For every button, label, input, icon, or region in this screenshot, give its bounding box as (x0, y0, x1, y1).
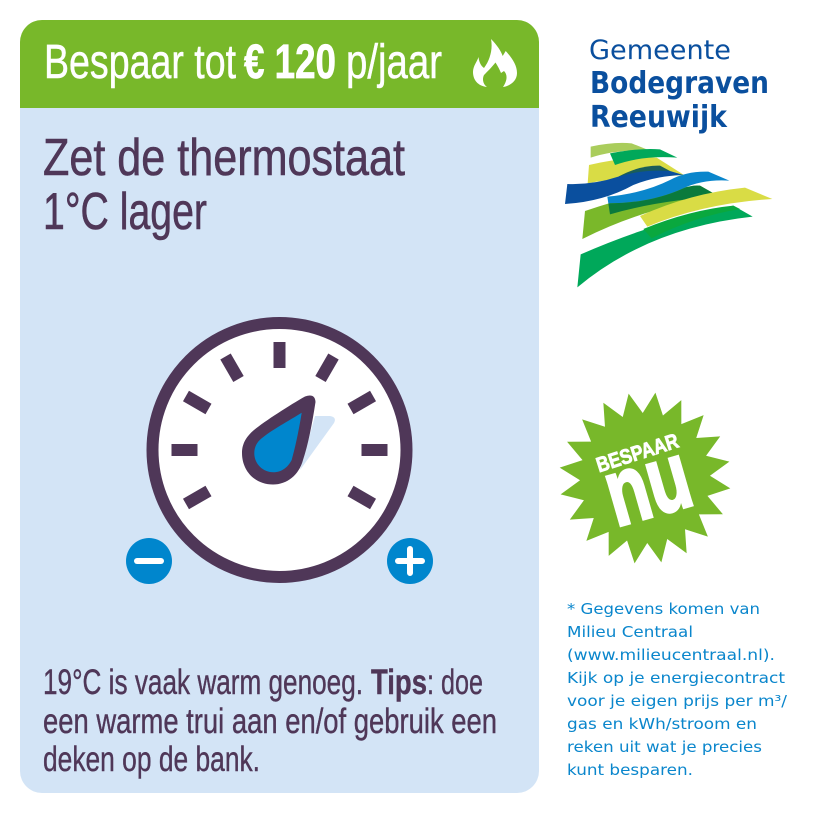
text block: tips: Tips (371, 663, 427, 702)
text block: footnote: Milieu Centraal (567, 623, 693, 641)
text block: footnote: kunt besparen. (567, 761, 693, 779)
text block: tips (43, 663, 497, 779)
needle outline (242, 396, 316, 484)
panel: tip card (20, 20, 539, 793)
logo: Gemeente Bodegraven Reeuwijk wordmark: Gemeente (589, 35, 731, 66)
text block: tips: 19°C is vaak warm genoeg. (43, 663, 363, 702)
logo: Gemeente Bodegraven Reeuwijk wordmark (589, 35, 769, 135)
text block: tips: : doe (427, 663, 483, 702)
text block: footnote: voor je eigen prijs per m³/ (567, 692, 788, 710)
badge: bespaar nu (557, 390, 733, 566)
text block: footnote: gas en kWh/stroom en (567, 715, 757, 733)
needle fill (254, 413, 302, 472)
text block: tips: deken op de bank. (43, 740, 260, 779)
text block: footnote: * Gegevens komen van (567, 600, 760, 618)
text block: footnote (567, 600, 788, 779)
badge: bespaar nu: BESPAAR (594, 430, 682, 477)
logo: Gemeente Bodegraven Reeuwijk wordmark: Reeuwijk (590, 100, 728, 135)
icon: plus button (387, 538, 433, 584)
heading: savings banner: p/jaar (346, 36, 442, 89)
icon: minus button (126, 538, 172, 584)
badge: bespaar nu: nu (592, 421, 703, 547)
heading: main title: 1°C lager (43, 183, 207, 241)
icon: thermostat dial (152, 323, 406, 577)
text block: footnote: reken uit wat je precies (567, 738, 762, 756)
needle shadow (300, 416, 335, 470)
logo: landscape ribbons (565, 143, 772, 287)
logo: Gemeente Bodegraven Reeuwijk wordmark: Bodegraven (590, 66, 769, 101)
text block: footnote: Kijk op je energiecontract (567, 669, 785, 687)
text block: tips: een warme trui aan en/of gebruik een (43, 702, 497, 741)
heading: savings banner (44, 36, 442, 89)
dial tick marks (172, 342, 388, 504)
heading: savings banner: € 120 (244, 36, 336, 89)
icon: flame (473, 39, 517, 87)
heading: main title: Zet de thermostaat (43, 129, 405, 187)
heading: main title (43, 129, 405, 241)
text block: footnote: (www.milieucentraal.nl). (567, 646, 775, 664)
heading: savings banner: Bespaar tot (44, 36, 236, 89)
